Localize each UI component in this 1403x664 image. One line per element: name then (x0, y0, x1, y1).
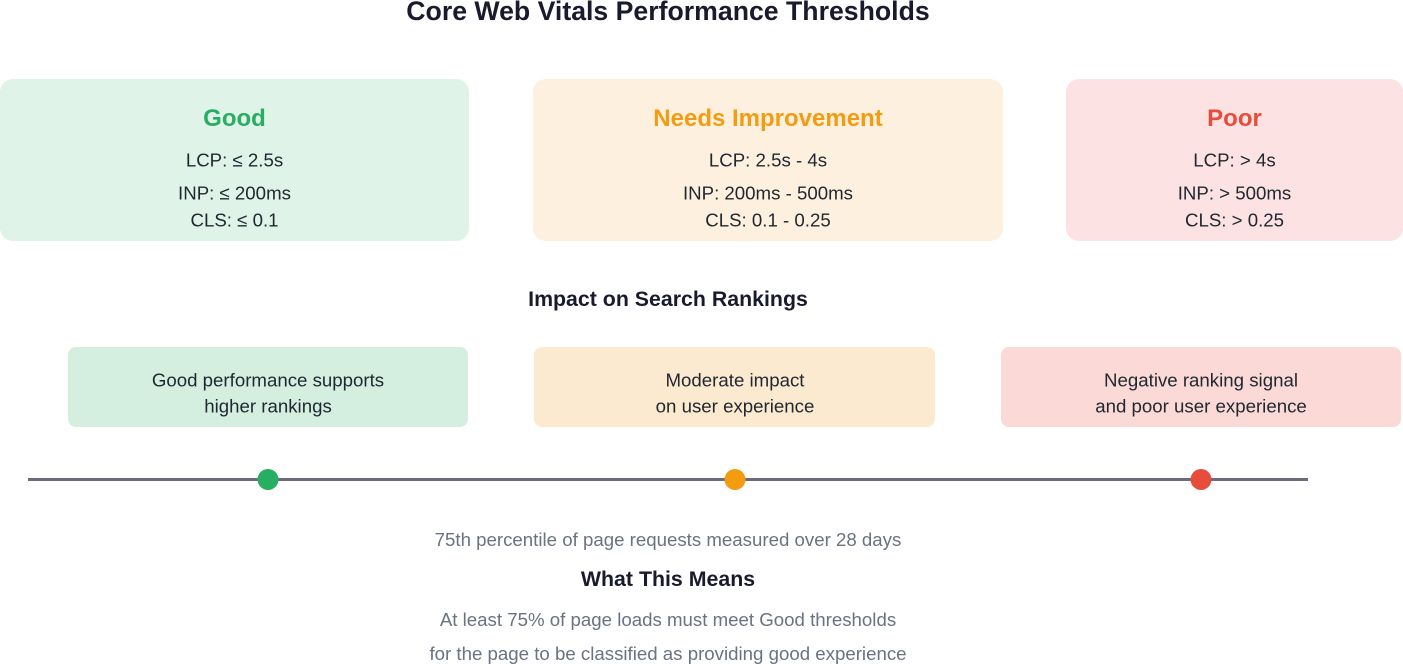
marker: good (258, 469, 278, 490)
impact box: good: Good performance supports (152, 370, 384, 391)
explanation text: for the page to be classified as providing good experience (429, 643, 907, 664)
impact box: negative (1001, 347, 1401, 427)
heading: needs improvement: Needs Improvement (653, 105, 883, 132)
good metrics (178, 150, 291, 231)
needs improvement metrics: INP: 200ms - 500ms (683, 183, 853, 204)
good metrics: INP: ≤ 200ms (178, 183, 291, 204)
heading: impact on search rankings: Impact on Search Rankings (528, 287, 808, 311)
impact box: negative: and poor user experience (1095, 396, 1307, 417)
explanation text (429, 609, 907, 664)
impact box: moderate: on user experience (656, 396, 814, 417)
impact box: good: higher rankings (204, 396, 332, 417)
measurement note: 75th percentile of page requests measured over 28 days (435, 529, 901, 550)
good metrics: LCP: ≤ 2.5s (186, 150, 283, 171)
heading: what this means: What This Means (581, 567, 755, 591)
panel: good thresholds (0, 79, 469, 241)
needs improvement metrics: CLS: 0.1 - 0.25 (705, 210, 831, 231)
poor metrics: LCP: > 4s (1193, 150, 1276, 171)
marker: needs improvement (724, 469, 746, 490)
poor metrics (1178, 150, 1291, 231)
impact box: moderate: Moderate impact (666, 370, 805, 391)
timeline scale (28, 469, 1308, 490)
impact box: negative: Negative ranking signal (1104, 370, 1298, 391)
needs improvement metrics: LCP: 2.5s - 4s (709, 150, 827, 171)
needs improvement metrics (683, 150, 853, 231)
poor metrics: CLS: > 0.25 (1185, 210, 1284, 231)
good metrics: CLS: ≤ 0.1 (190, 210, 279, 231)
heading: poor: Poor (1207, 105, 1262, 132)
heading: good: Good (203, 105, 266, 132)
impact box: moderate (534, 347, 935, 427)
poor metrics: INP: > 500ms (1178, 183, 1291, 204)
marker: poor (1190, 469, 1212, 490)
explanation text: At least 75% of page loads must meet Good thresholds (440, 609, 896, 630)
panel: needs improvement thresholds (533, 79, 1003, 241)
impact box: good (68, 347, 468, 427)
panel: poor thresholds (1066, 79, 1403, 241)
